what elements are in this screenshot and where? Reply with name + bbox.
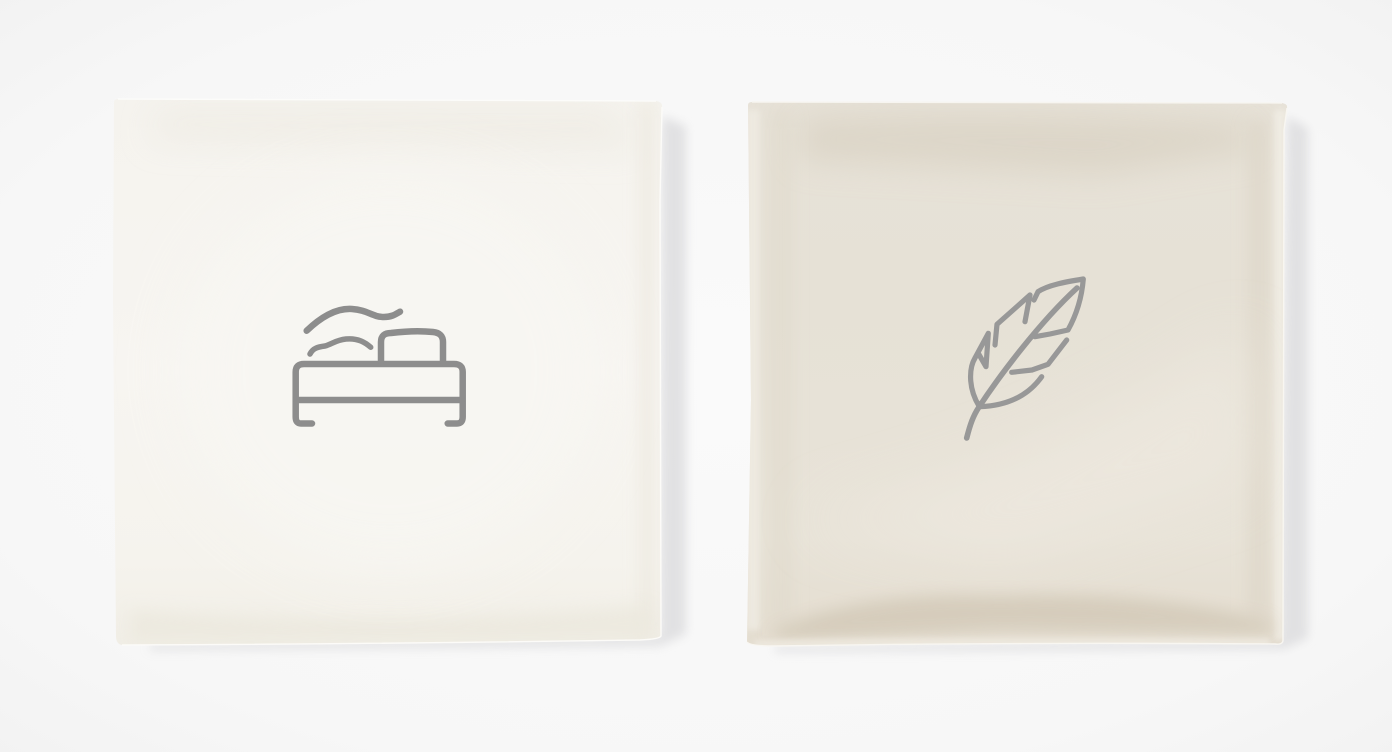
illustration: two fabric squares with icons — [114, 100, 1310, 652]
panel: right beige fabric square — [746, 102, 1287, 650]
panel: left cream fabric square — [113, 99, 662, 645]
icon: feather — [967, 279, 1083, 438]
shadows beneath panels — [150, 116, 1308, 652]
subtle fold shading — [130, 100, 654, 642]
fold shading and highlights — [746, 110, 1286, 650]
icon: bed with pillow and blanket waves — [296, 309, 463, 424]
